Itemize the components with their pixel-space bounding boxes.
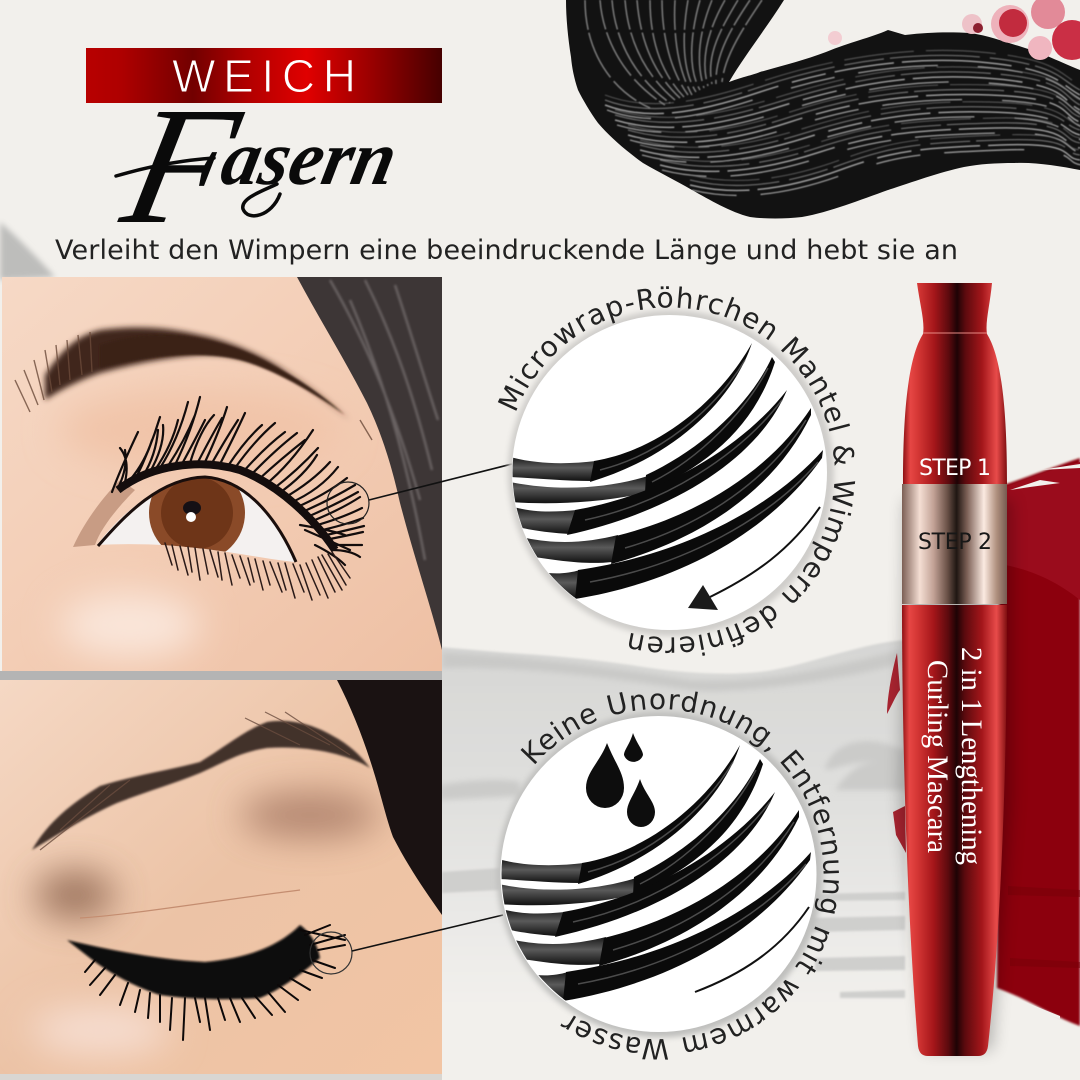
upper lashes (112, 397, 364, 565)
mascara swatch top right (566, 0, 1080, 218)
cap rim line (923, 332, 987, 334)
script heading: Fasern (109, 73, 414, 259)
red berries decoration (828, 0, 1080, 60)
swash strokes (116, 158, 280, 216)
lens circle 1: lash fibre close-up (508, 310, 834, 636)
magnifier ring (327, 482, 369, 524)
eyelid crease (80, 890, 300, 918)
script heading: Fasern: F (109, 73, 255, 259)
hair (337, 680, 442, 915)
fan strands (585, 0, 762, 108)
curved label 1: Microwrap-Röhrchen Mantel & Wimpern definieren (498, 286, 856, 656)
iris (149, 478, 245, 552)
eyebrow (15, 328, 372, 440)
eyebrow (32, 712, 370, 850)
thin lash line (695, 907, 809, 992)
title banner: WEICH: WEICH (172, 50, 356, 102)
lower tube (902, 605, 1007, 1056)
photo: open eye with long lashes (2, 277, 442, 671)
grey gap between photos (0, 671, 442, 680)
connector line: bottom (352, 915, 503, 951)
photo: closed eye with mascara (0, 680, 442, 1074)
hair (297, 277, 442, 650)
product name: 2 in 1 Lengthening (955, 647, 988, 865)
lower lashes (165, 543, 350, 600)
eyelid crease (73, 480, 135, 547)
cap (903, 283, 1007, 484)
product name (921, 647, 988, 865)
red paint stroke (887, 458, 1080, 1026)
individual lashes (85, 925, 345, 1040)
metal band (902, 484, 1007, 604)
lash fibres (510, 343, 823, 599)
script heading: Fasern: asern (214, 116, 405, 202)
lash fibres (498, 745, 811, 1001)
title banner: WEICH (86, 48, 442, 103)
step 1 label: STEP 1 (919, 456, 991, 481)
connector line: top (369, 464, 512, 500)
curved arrow (688, 507, 820, 610)
lens circle 2: lash fibre close-up (497, 712, 823, 1038)
product name: Curling Mascara (921, 660, 954, 853)
step 2 label: STEP 2 (918, 530, 992, 555)
sweep strands (605, 50, 1080, 195)
eye white (98, 490, 294, 562)
grey ink wash background (0, 222, 905, 1080)
lash mass (67, 925, 320, 999)
subtitle: Verleiht den Wimpern eine beeindruckende Länge und hebt sie an (55, 235, 958, 266)
magnifier ring (310, 932, 352, 974)
tube shadow (900, 500, 1012, 1050)
icon: water drops (586, 733, 655, 827)
product: mascara tube (900, 283, 1012, 1056)
curved label 2: Keine Unordnung, Entfernung mit warmem Wasser (520, 692, 839, 1060)
